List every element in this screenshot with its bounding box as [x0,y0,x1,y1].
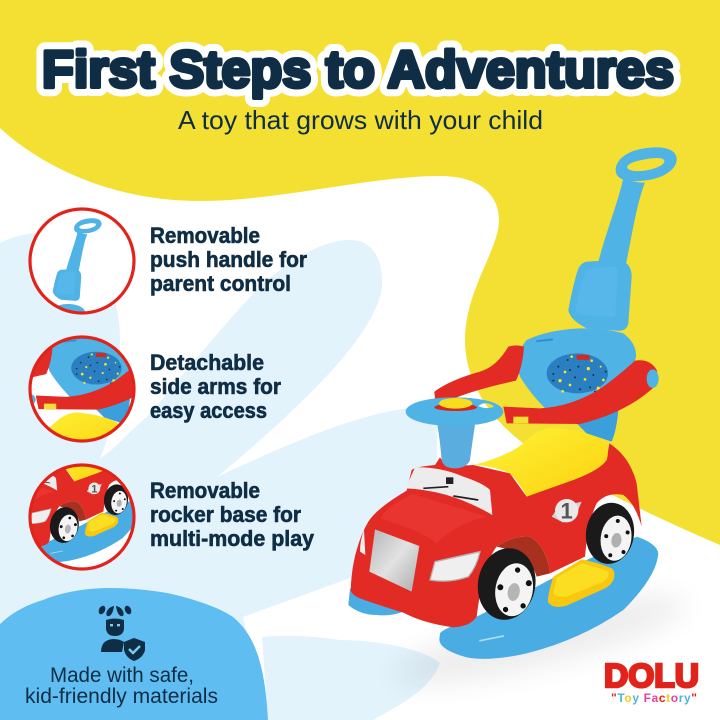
icon: rocker base circle [28,463,136,571]
icon: push handle circle [30,209,134,320]
panel: feature 3 removable rocker base [28,463,314,571]
speaker with stars [547,353,608,393]
feature text 1 [150,223,307,296]
side arms [434,345,659,424]
seat post [573,410,618,442]
feature text 2 [150,350,281,423]
safety text: Made with safe, [50,664,194,687]
panel: feature 2 detachable side arms [28,335,281,443]
subtitle: A toy that grows with your child [178,105,543,135]
windshield [406,467,492,515]
title: First Steps to Adventures [42,41,674,99]
badge number one: 1 [561,499,573,524]
feature text 1: parent control [150,271,291,296]
badge number one [552,499,582,524]
steering wheel [406,397,503,468]
feature text 3 [150,478,315,551]
feature text 2: side arms for [150,374,281,399]
title: First Steps to Adventures [42,41,674,99]
logo: Dolu Toy Factory: "Toy Factory" [611,691,697,705]
feature text 2: Detachable [150,350,264,375]
grille [369,529,419,592]
headlight [430,552,480,581]
seat [473,427,608,497]
safety text [25,664,218,708]
front wheel [472,544,541,624]
toy shadow [388,578,692,702]
seat back [518,328,636,410]
feature text 3: multi-mode play [150,526,315,551]
feature text 2: easy access [150,398,267,423]
feature text 3: rocker base for [150,502,301,527]
feature text 1: push handle for [150,247,307,272]
panel: safety badge [0,588,268,720]
foot pedal [548,559,614,607]
feature text 1: Removable [150,223,260,248]
rocker base [348,537,658,659]
icon: side arms circle [28,335,136,443]
safety text: kid-friendly materials [25,685,218,708]
rear wheel [582,500,638,567]
logo: Dolu Toy Factory: DOLU [604,657,699,694]
feature text 3: Removable [150,478,260,503]
icon: child with shield [97,605,145,661]
panel: feature 1 removable push handle [30,209,307,320]
illustration: ride-on toy car [348,147,677,659]
push handle [568,147,677,331]
car body [351,427,642,627]
background: pale blue shapes [0,233,440,720]
